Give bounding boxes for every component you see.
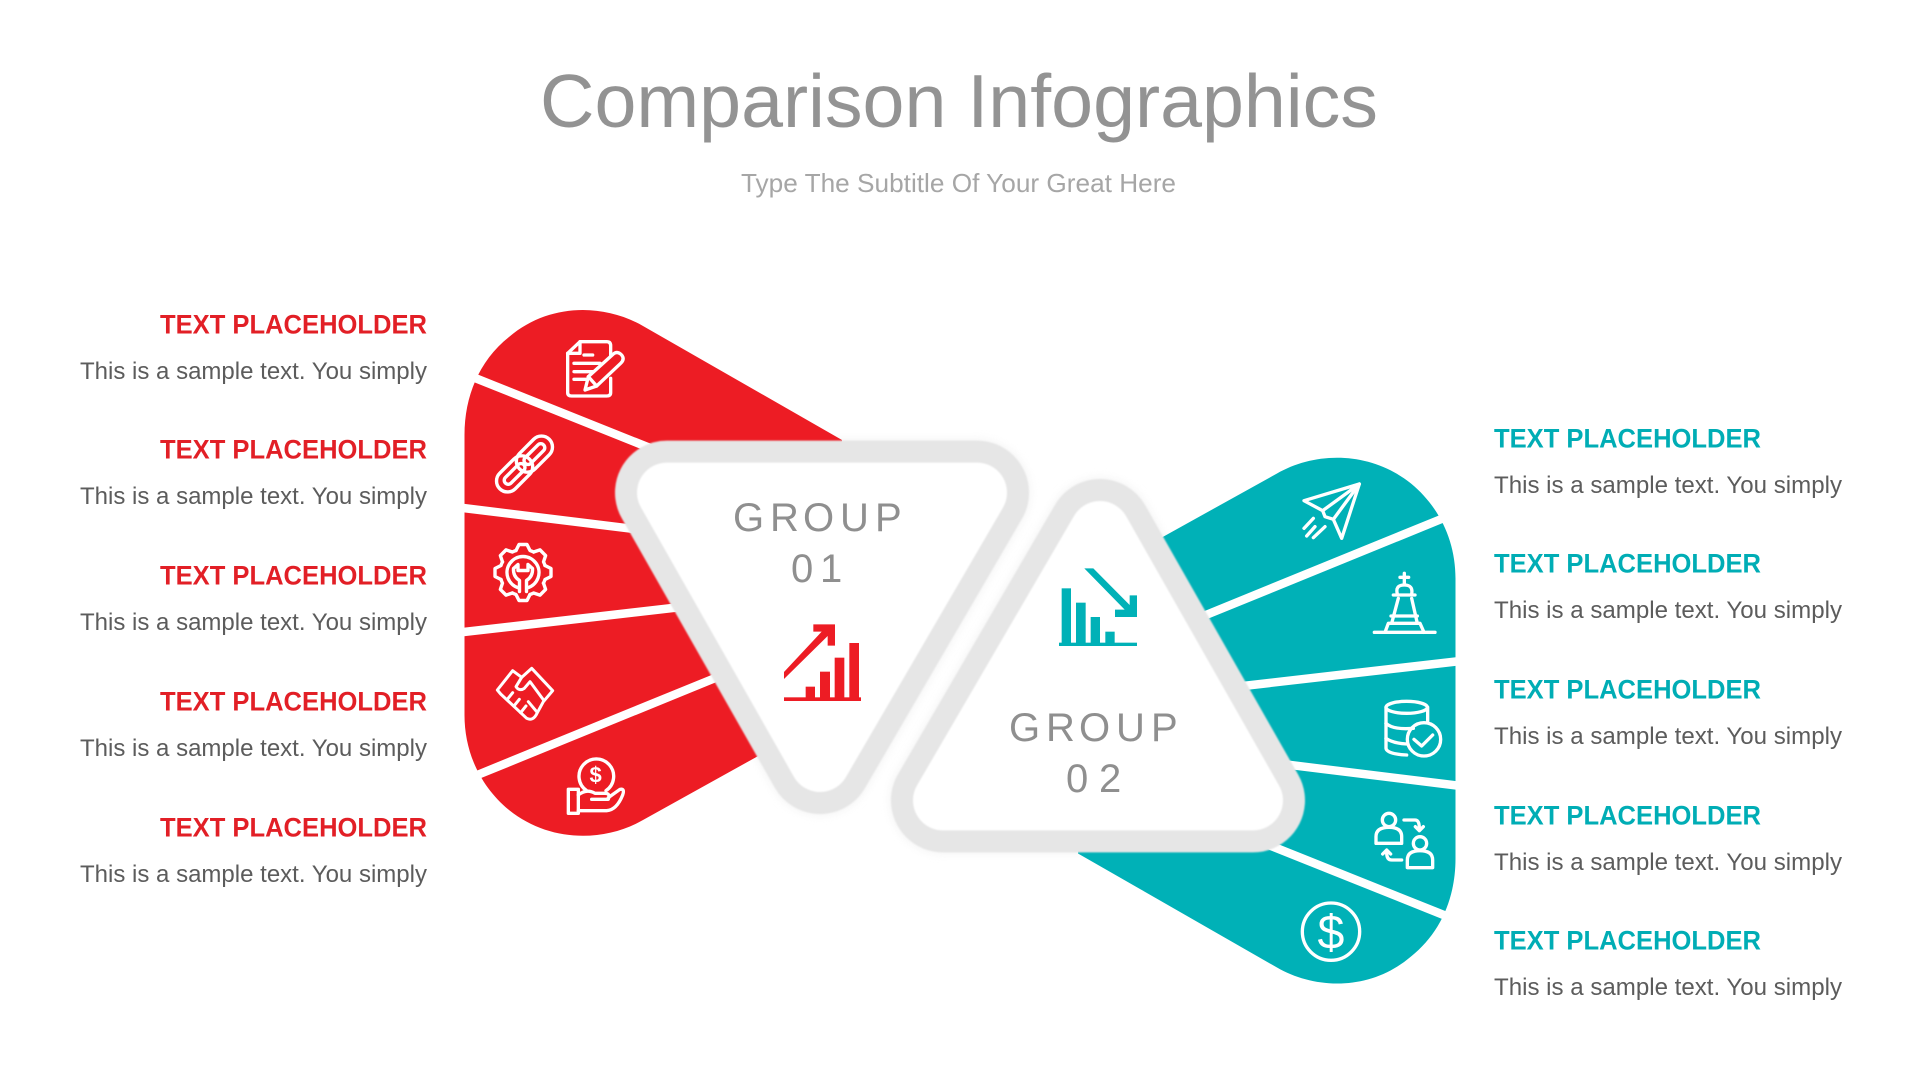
label 3 heading: TEXT PLACEHOLDER (160, 560, 427, 590)
label 3 body: This is a sample text. You simply (80, 609, 428, 636)
icon: falling bar chart (1059, 568, 1137, 646)
subtitle: Type The Subtitle Of Your Great Here (741, 168, 1176, 198)
icon: rising bar chart (784, 624, 861, 701)
label 2 heading: TEXT PLACEHOLDER (160, 434, 427, 464)
label 2 body: This is a sample text. You simply (80, 483, 428, 510)
label 4 body: This is a sample text. You simply (1494, 849, 1843, 876)
label 4 heading: TEXT PLACEHOLDER (1494, 800, 1761, 830)
icon: dollar coin (1302, 903, 1360, 960)
label 1 heading: TEXT PLACEHOLDER (160, 309, 427, 339)
label 5 body: This is a sample text. You simply (1494, 974, 1843, 1001)
group 02 number: 02 (1066, 757, 1121, 801)
label 1 body: This is a sample text. You simply (80, 358, 428, 385)
label 2 heading: TEXT PLACEHOLDER (1494, 548, 1761, 578)
label 4 body: This is a sample text. You simply (80, 735, 428, 762)
panel: red fan shape (455, 310, 842, 836)
icon: handshake (497, 668, 553, 719)
label 4 heading: TEXT PLACEHOLDER (160, 686, 427, 716)
icon: chain link (492, 431, 557, 497)
label 5 heading: TEXT PLACEHOLDER (1494, 925, 1761, 955)
label 1 heading: TEXT PLACEHOLDER (1494, 423, 1761, 453)
label 5 heading: TEXT PLACEHOLDER (160, 812, 427, 842)
label 3 heading: TEXT PLACEHOLDER (1494, 674, 1761, 704)
panel: group 01 left text labels (80, 309, 428, 888)
panel: teal fan shape (1078, 458, 1465, 984)
label 3 body: This is a sample text. You simply (1494, 723, 1843, 750)
group 01 label: GROUP (733, 496, 902, 540)
panel: group 02 right text labels (1494, 423, 1843, 1001)
panel: group 02 triangle (943, 531, 1253, 801)
group 02 label: GROUP (1009, 706, 1178, 750)
icon: coin in hand (568, 759, 623, 813)
label 2 body: This is a sample text. You simply (1494, 597, 1843, 624)
coin dollar sign: $ (590, 763, 602, 788)
label 1 body: This is a sample text. You simply (1494, 472, 1843, 499)
icon: database with check (1386, 701, 1441, 756)
icon: document and pencil (568, 342, 623, 396)
icon: gear with wrench (495, 544, 551, 600)
icon: paper plane (1304, 484, 1359, 538)
icon: people exchange (1376, 813, 1433, 868)
group 01 number: 01 (791, 547, 842, 591)
soft glow behind triangles (667, 493, 1253, 800)
icon: chess king (1374, 573, 1435, 632)
icon: dollar coin: $ (1318, 905, 1345, 959)
panel: group 01 triangle (667, 493, 977, 762)
title: Comparison Infographics (540, 59, 1378, 143)
label 5 body: This is a sample text. You simply (80, 861, 428, 888)
